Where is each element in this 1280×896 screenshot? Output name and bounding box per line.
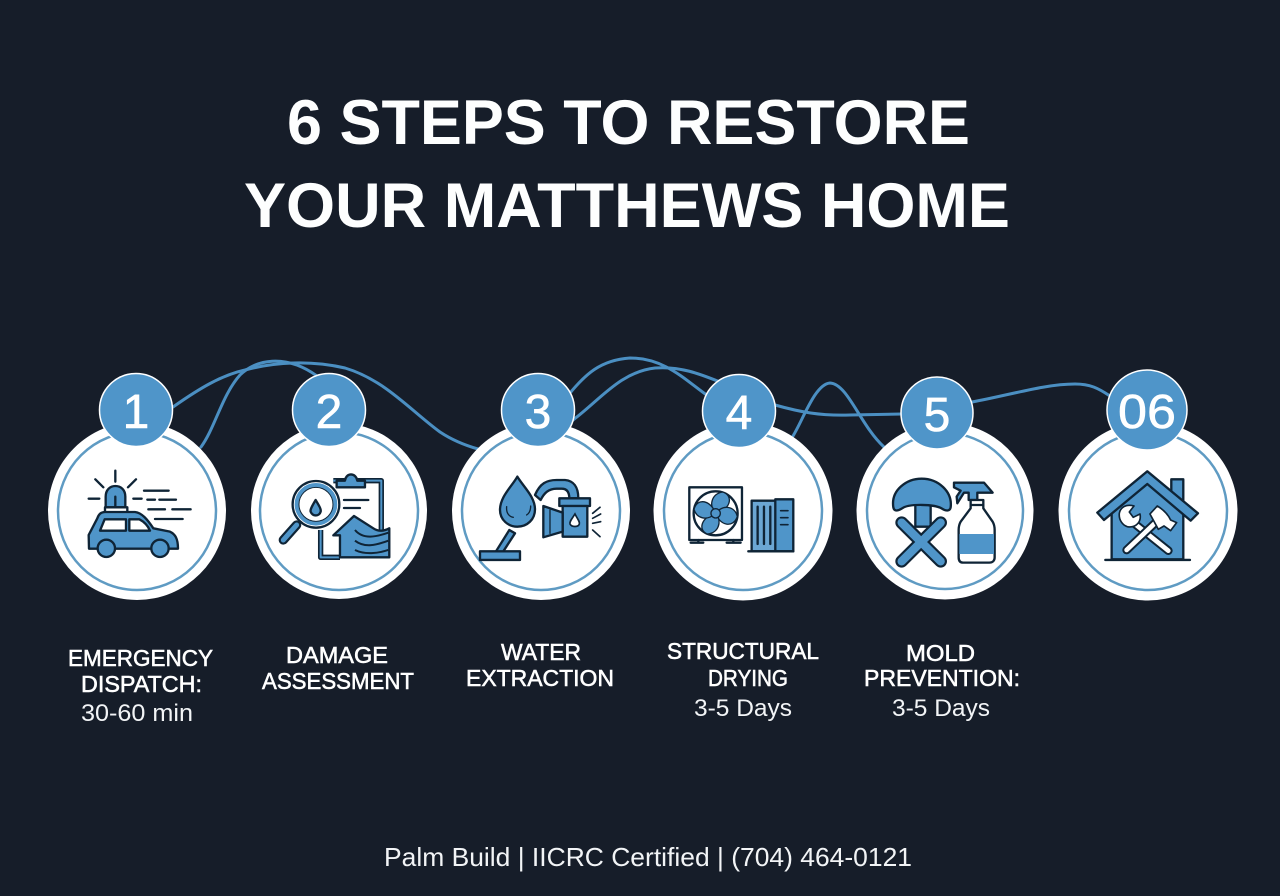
connecting wavy lines (173, 358, 1110, 449)
step 5 label: PREVENTION: (864, 665, 1020, 691)
step 3 badge: 3 (525, 386, 551, 439)
step 4 label: STRUCTURAL (667, 638, 819, 664)
step 2 label: DAMAGE (286, 642, 388, 668)
step 3: water extraction (452, 374, 630, 691)
step 5 label: MOLD (906, 640, 975, 666)
step 1 label: DISPATCH: (81, 671, 202, 697)
step 4 badge (702, 374, 776, 448)
step 6: restored home (1058, 370, 1238, 600)
step 1 badge: 1 (123, 386, 149, 439)
step 5 icon: crossed mushroom and spray bottle (893, 479, 995, 563)
step 2 label (262, 642, 414, 694)
step 4 icon: fan and dehumidifier (689, 487, 793, 551)
step 1 badge (100, 374, 172, 446)
step 1: emergency dispatch (48, 374, 226, 727)
step 4 label: 3-5 Days (694, 695, 792, 722)
title (244, 88, 1010, 241)
step 5 label: 3-5 Days (892, 695, 990, 722)
step 3 label: WATER (501, 639, 581, 665)
step 4 label: DRYING (708, 665, 788, 691)
step 6 badge: 06 (1118, 386, 1176, 439)
step 6 badge (1107, 370, 1187, 450)
footer: Palm Build | IICRC Certified | (704) 464-0121 (384, 842, 912, 872)
step 2 label: ASSESSMENT (262, 668, 414, 694)
step 1 label: 30-60 min (81, 700, 193, 727)
step 4: structural drying (654, 374, 832, 722)
step 5 badge: 5 (924, 389, 950, 442)
step 5 circle (856, 422, 1034, 600)
step 5: mold prevention (856, 377, 1034, 722)
step 3 badge (502, 374, 574, 446)
step 1 circle (48, 422, 226, 600)
title: 6 STEPS TO RESTORE (287, 88, 970, 158)
step 4 circle (654, 422, 832, 600)
step 2 badge: 2 (316, 386, 342, 439)
step 3 label (466, 639, 614, 691)
step 4 label (667, 638, 819, 722)
title: YOUR MATTHEWS HOME (244, 171, 1010, 241)
step 3 icon: water drop, wand and extractor (480, 477, 601, 560)
step 6 icon: house with crossed tools (1097, 471, 1198, 560)
step 2 badge (292, 374, 366, 446)
step 1 label (68, 645, 213, 727)
step 3 circle (452, 422, 630, 600)
step 2 icon: magnifier, clipboard, flooded house (283, 474, 389, 557)
step 4 badge: 4 (726, 387, 752, 440)
step 1 icon: car with beacon (89, 471, 191, 557)
step 5 label (864, 640, 1020, 722)
step 3 label: EXTRACTION (466, 665, 614, 691)
step 2: damage assessment (251, 374, 427, 694)
step 6 circle (1058, 422, 1238, 600)
step 1 label: EMERGENCY (68, 645, 213, 671)
step 5 badge (901, 377, 973, 449)
step 2 circle (251, 423, 427, 599)
